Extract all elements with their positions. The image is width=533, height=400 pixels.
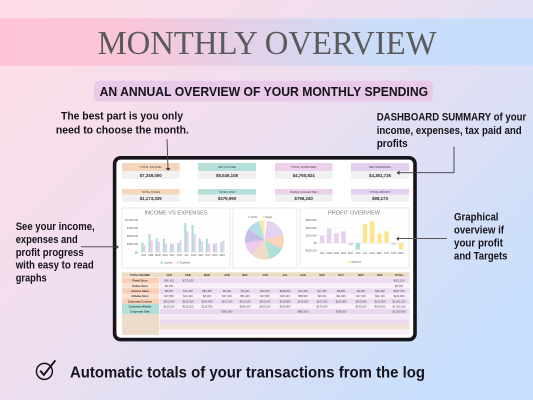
income table: JAN: [166, 273, 172, 277]
text: dashboard summary: [377, 112, 527, 150]
income table: Corporate Courses: [128, 299, 153, 303]
income table: $17,800: [164, 294, 174, 298]
arrow: to profit chart: [396, 236, 447, 241]
text: dashboard summary: profits: [377, 138, 408, 150]
chart: profit overview: $200,000: [306, 226, 317, 230]
stat card: taxes collected: $796,240: [295, 196, 313, 201]
dashboard device: [115, 158, 415, 340]
chart: income vs expenses: MAY: [169, 253, 175, 257]
arrow: to net expenses: [396, 147, 454, 175]
chart: income vs expenses: JUL: [184, 253, 189, 257]
chart: profit overview: $300,000: [306, 218, 317, 222]
text: income progress graphs: See your income,: [16, 221, 95, 233]
income table: $102,100: [394, 279, 405, 283]
text: income progress graphs: with easy to read: [15, 260, 94, 272]
chart: income vs expenses: [122, 208, 230, 268]
chart: profit overview: $0: [314, 241, 317, 245]
stat card: taxes paid: $379,990: [218, 196, 237, 201]
chart: profit overview: PROFIT OVERVIEW: [328, 210, 381, 216]
chart: income vs expenses: INCOME VS EXPENSES: [144, 210, 208, 216]
income table: $11,400: [336, 294, 346, 298]
stat card: total income: [122, 163, 180, 179]
chart: profit overview: MAY: [348, 251, 354, 255]
stat card: net income: [198, 163, 256, 179]
income table: $6,700: [165, 284, 174, 288]
income table: $104,400: [202, 299, 213, 303]
chart: profit overview: APR: [341, 251, 346, 255]
income table: $1,203,300: [393, 310, 406, 314]
chart: income vs expenses: $250,000: [127, 242, 139, 246]
income table: $105,500: [336, 299, 347, 303]
income table: Online Store: [132, 284, 148, 288]
stat card: total profit: $98,173: [372, 196, 388, 201]
income table: SEP: [319, 273, 325, 277]
stat card: taxes paid: TAXES PAID: [219, 190, 235, 194]
income table: $1,021,100: [393, 304, 406, 308]
income table: $8,600: [165, 289, 174, 293]
income table: NOV: [358, 273, 364, 277]
income table: $109,800: [280, 299, 291, 303]
income table: JUL: [282, 273, 288, 277]
chart: income vs expenses: OCT: [205, 253, 211, 257]
income table: $173,100: [317, 304, 328, 308]
stat card: total taxes: $1,173,339: [140, 196, 162, 201]
stat card: net expenses: $4,381,725: [369, 173, 392, 178]
income table: $100,100: [375, 304, 386, 308]
chart: income vs expenses: AUG: [191, 253, 197, 257]
chart: profit overview: JUN: [355, 251, 361, 255]
income table: TOTAL: [395, 273, 404, 277]
chart: income vs expenses: JAN: [141, 253, 146, 257]
stat card: net income: $5,546,108: [216, 173, 239, 178]
income table: AUG: [300, 273, 306, 277]
income table: MAR: [204, 273, 210, 277]
stat card: total expenses: [275, 163, 332, 179]
chart: income vs expenses: MAR: [155, 253, 161, 257]
income table: $107,200: [222, 299, 233, 303]
chart: income vs expenses: $1,000,000: [125, 218, 139, 222]
subtitle pill: [94, 81, 433, 102]
text: choose the month: The best part is you only: [61, 111, 184, 123]
income table: $102,300: [317, 299, 328, 303]
income table: $100,100: [240, 299, 251, 303]
income table: $273,180: [183, 279, 194, 283]
text: graphical overview: [454, 212, 508, 262]
chart: profit overview: OCT: [384, 251, 390, 255]
chart: profit overview: DEC: [398, 251, 404, 255]
income table: APR: [224, 273, 230, 277]
chart: profit and target pie: Profit: [251, 215, 257, 219]
income table: $33,500: [260, 289, 270, 293]
income table: $188,500: [280, 289, 291, 293]
text: graphical overview: your profit: [454, 238, 503, 250]
footer text: Automatic totals of your transactions from the log: [70, 365, 425, 382]
stat card: net expenses: NET EXPENSES: [369, 165, 391, 169]
chart: profit overview: AUG: [369, 251, 375, 255]
income table: [122, 272, 410, 335]
income table: $51,100: [240, 294, 250, 298]
chart: profit overview: PROFIT: [352, 260, 361, 264]
stat card: total profit: TOTAL PROFIT: [370, 190, 390, 194]
stat card: total profit: [351, 189, 409, 202]
income table: $100,000: [375, 299, 386, 303]
income table: Corporate Gifts: [130, 310, 150, 314]
text: income progress graphs: profit progress: [16, 247, 84, 259]
chart: income vs expenses: APR: [162, 253, 168, 257]
chart: profit and target pie: Target: [265, 215, 272, 219]
income table: $8,100: [203, 294, 212, 298]
income table: Alibaba Store: [131, 294, 149, 298]
chart: profit overview: FEB: [327, 251, 332, 255]
stat card: total expenses: TOTAL EXPENSES: [291, 165, 316, 169]
stat card: total taxes: [122, 189, 180, 202]
chart: profit and target pie: [233, 208, 297, 268]
income table: $100,100: [260, 299, 271, 303]
chart: income vs expenses: SEP: [198, 253, 204, 257]
income table: Retail Store: [133, 279, 148, 283]
chart: income vs expenses: NOV: [212, 253, 218, 257]
income table: DEC: [377, 273, 383, 277]
income table: $3,100: [241, 289, 250, 293]
income table: $18,100: [280, 294, 290, 298]
income table: $392,000: [222, 310, 233, 314]
chart: profit overview: -$100,000: [305, 249, 317, 253]
income table: $8,100: [318, 294, 327, 298]
chart: income vs expenses: Income: [164, 261, 173, 265]
text: income progress graphs: [15, 221, 95, 285]
chart: profit overview: SEP: [377, 251, 382, 255]
stat card: taxes collected: TAXES COLLECTED: [290, 190, 317, 194]
income table: OCT: [338, 273, 344, 277]
arrow: to income chart: [81, 245, 119, 249]
income table: $110,700: [202, 304, 213, 308]
stat card: net income: NET INCOME: [218, 165, 236, 169]
text: choose the month: need to choose the month.: [56, 125, 189, 137]
text: income progress graphs: expenses and: [16, 234, 78, 246]
income table: $9,800: [337, 289, 346, 293]
chart: income vs expenses: DEC: [220, 253, 225, 257]
income table: Amazon Sales: [131, 289, 150, 293]
income table: $9,400: [357, 289, 366, 293]
chart: profit overview: $100,000: [306, 234, 317, 238]
income table: JUN: [262, 273, 268, 277]
income table: $6,700: [395, 284, 404, 288]
chart: income vs expenses: JUN: [177, 253, 182, 257]
income table: $100,900: [280, 304, 291, 308]
income table: $112,200: [183, 304, 194, 308]
income table: $102,500: [164, 299, 175, 303]
text: choose the month: [56, 111, 189, 137]
income table: $105,000: [356, 299, 367, 303]
title band: [0, 18, 533, 66]
income table: $803,000: [298, 310, 309, 314]
income table: $33,400: [375, 289, 385, 293]
chart: income vs expenses: Expense: [180, 261, 191, 265]
chart: profit overview: MAR: [334, 251, 339, 255]
icon: check mark: [36, 360, 55, 379]
chart: profit overview: JAN: [320, 251, 325, 255]
stat card: taxes paid: [198, 189, 256, 202]
stat card: total expenses: $4,760,824: [293, 173, 315, 178]
chart: income vs expenses: FEB: [148, 253, 153, 257]
chart: profit overview: JUL: [363, 251, 368, 255]
income table: $102,100: [260, 304, 271, 308]
income table: $120,000: [298, 299, 309, 303]
income table: $109,300: [183, 299, 194, 303]
text: graphical overview: Graphical: [454, 212, 498, 224]
arrow: to total income: [166, 139, 171, 171]
stat card: net expenses: [351, 163, 409, 179]
income table: $130,100: [356, 304, 367, 308]
income table: Corporate Weekly: [129, 304, 152, 308]
income table: $407,700: [394, 289, 405, 293]
income table: $1,601,100: [393, 299, 406, 303]
income table: $8,100: [223, 289, 232, 293]
text: income progress graphs: graphs: [16, 273, 47, 285]
title: MONTHLY OVERVIEW: [98, 25, 437, 62]
income table: FEB: [185, 273, 191, 277]
income table: $17,200: [298, 289, 308, 293]
income table: $17,200: [317, 289, 327, 293]
income table: $58,900: [298, 294, 308, 298]
stat card: total income: $7,349,000: [140, 173, 162, 178]
income table: $21,100: [375, 294, 385, 298]
income table: $180,100: [240, 304, 251, 308]
text: graphical overview: and Targets: [454, 250, 508, 262]
income table: $308,300: [336, 310, 347, 314]
text: graphical overview: overview if: [454, 224, 504, 236]
chart: income vs expenses: $750,000: [127, 226, 139, 230]
income table: TOTAL INCOME: [130, 273, 150, 277]
income table: $81,300: [202, 289, 212, 293]
chart: profit overview: [300, 208, 409, 268]
income table: $13,100: [183, 289, 193, 293]
income table: $17,100: [222, 294, 232, 298]
stat card: total income: TOTAL INCOME: [140, 165, 161, 169]
income table: MAY: [242, 273, 248, 277]
chart: profit overview: NOV: [391, 251, 397, 255]
chart: income vs expenses: $500,000: [127, 234, 139, 238]
income table: $13,100: [183, 294, 193, 298]
income table: $17,100: [356, 294, 366, 298]
stat card: total taxes: TOTAL TAXES: [141, 190, 160, 194]
income table: $36,100: [164, 279, 174, 283]
stat card: taxes collected: [275, 189, 332, 202]
income table: $122,100: [164, 304, 175, 308]
income table: $17,800: [260, 294, 270, 298]
chart: income vs expenses: $0: [135, 250, 139, 254]
income table: $124,600: [394, 294, 405, 298]
subtitle pill: AN ANNUAL OVERVIEW OF YOUR MONTHLY SPENDING: [100, 84, 428, 99]
